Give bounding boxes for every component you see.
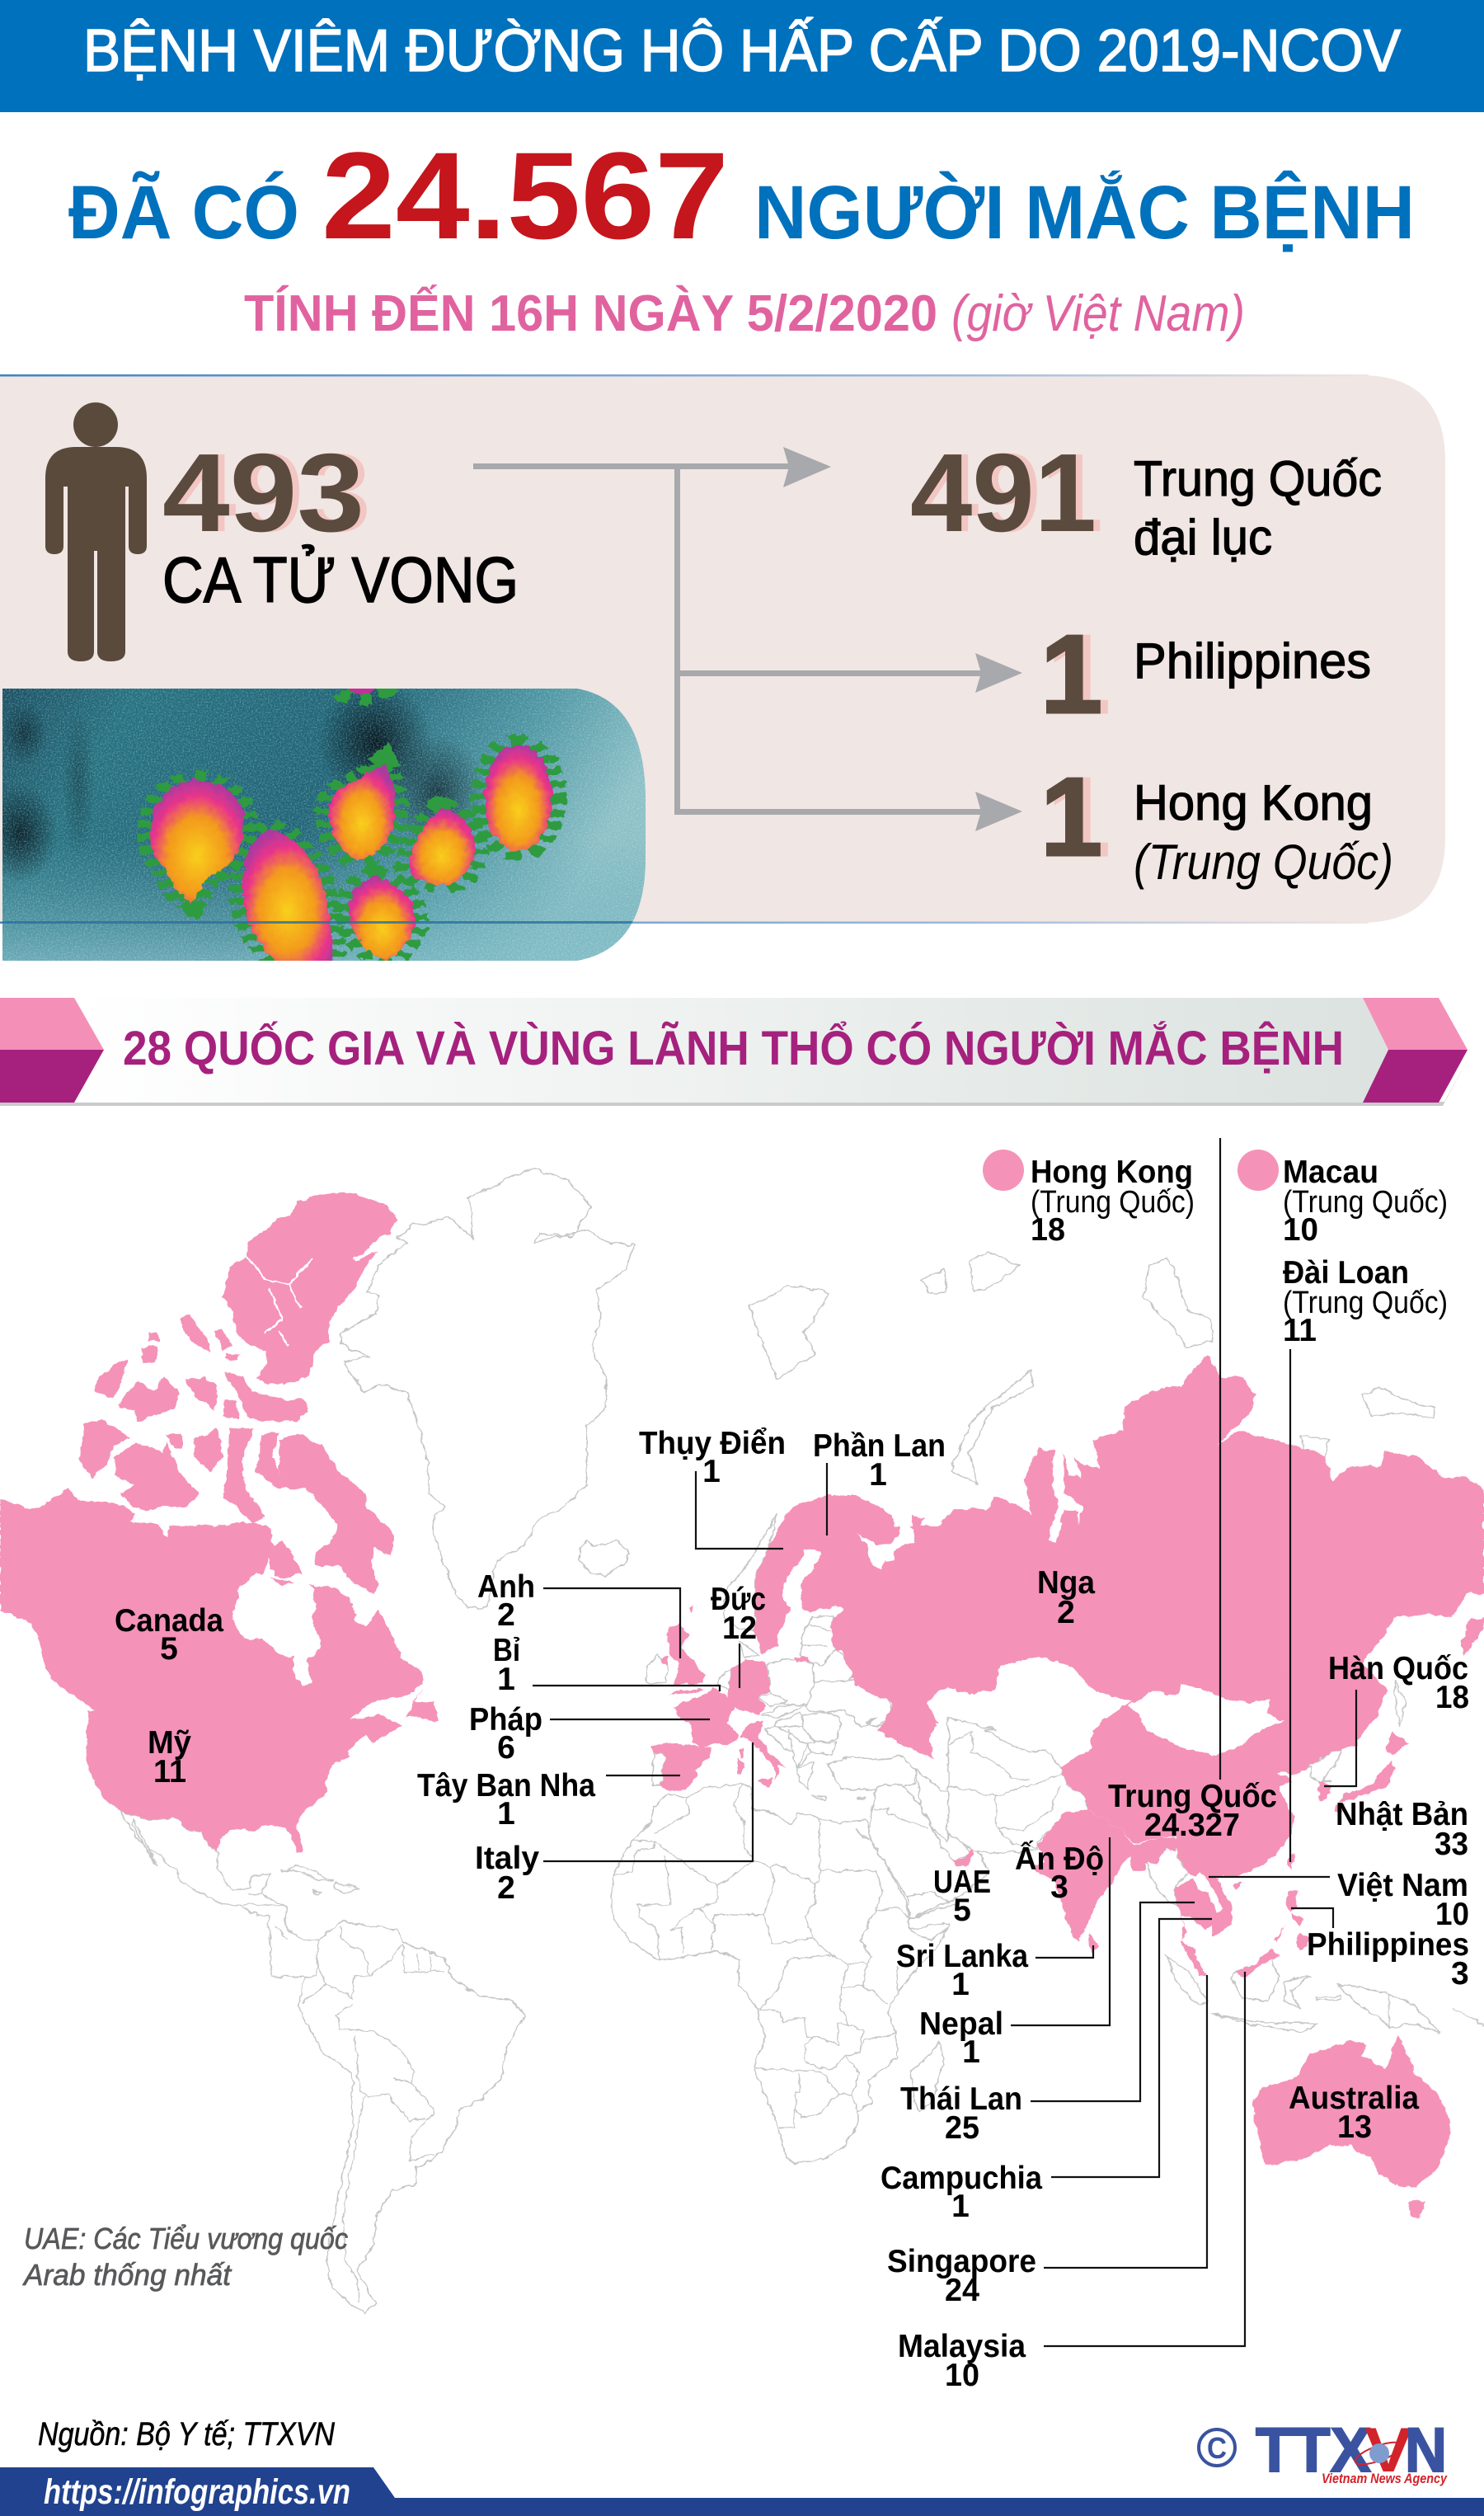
label: UAE: 5	[953, 1893, 971, 1928]
footer bar	[0, 2467, 1484, 2516]
label: Thái Lan	[900, 2081, 1022, 2146]
label: Thái Lan: Thái Lan	[900, 2081, 1022, 2117]
label: Phần Lan: Phần Lan	[813, 1428, 946, 1464]
label: Pháp	[469, 1702, 542, 1766]
label: Canada	[115, 1603, 223, 1667]
label: Malaysia: Malaysia	[898, 2329, 1026, 2364]
label: Ấn Độ: 3	[1050, 1869, 1068, 1905]
photo: coronavirus micrograph	[0, 679, 651, 965]
label: Trung Quốc đại lục	[1134, 451, 1382, 565]
label: Philippines: Philippines	[1134, 633, 1371, 689]
world map	[0, 1138, 1484, 2393]
label: Anh: 2	[497, 1597, 515, 1633]
label: Việt Nam: Việt Nam	[1337, 1868, 1468, 1903]
label: Hong Kong with marker: 18	[1031, 1212, 1065, 1248]
label: Italy	[475, 1841, 539, 1906]
number 491: 491	[917, 430, 1103, 555]
label: Thái Lan: 25	[945, 2110, 979, 2146]
logo: TTXVN: TTX	[1256, 2415, 1371, 2485]
label: Sri Lanka: 1	[951, 1967, 970, 2002]
label: Macau with marker	[1237, 1150, 1448, 1248]
label: UAE	[933, 1865, 991, 1928]
label: Thụy Điển: Thụy Điển	[639, 1426, 786, 1461]
label: UAE: UAE	[933, 1865, 991, 1900]
label: Bỉ: Bỉ	[493, 1633, 520, 1668]
label: Macau with marker: (Trung Quốc)	[1283, 1185, 1448, 1220]
country labels	[115, 1150, 1469, 2393]
arrows	[473, 447, 1022, 831]
label: Trung Quốc: Trung Quốc	[1108, 1779, 1277, 1814]
label: Thụy Điển: 1	[702, 1454, 721, 1489]
label: Pháp: Pháp	[469, 1702, 542, 1738]
label: Hàn Quốc: Hàn Quốc	[1328, 1651, 1468, 1686]
number 491: 491	[910, 430, 1097, 555]
label: Việt Nam: 10	[1435, 1897, 1469, 1932]
note: UAE: Arab thống nhất	[22, 2258, 232, 2292]
label: Campuchia	[881, 2161, 1042, 2224]
label: Australia: 13	[1337, 2109, 1372, 2145]
label: Nepal	[919, 2006, 1003, 2070]
label: Đức: Đức	[711, 1582, 766, 1617]
label: Nhật Bản: Nhật Bản	[1336, 1797, 1468, 1832]
source: Nguồn: Bộ Y tế; TTXVN	[38, 2416, 335, 2453]
label: Hàn Quốc: 18	[1435, 1680, 1469, 1715]
label: Mỹ	[148, 1725, 191, 1789]
label: Tây Ban Nha	[417, 1768, 595, 1832]
label: Thụy Điển	[639, 1426, 786, 1489]
label: Italy: 2	[497, 1870, 515, 1906]
label: Macau with marker: 10	[1283, 1212, 1318, 1248]
label: Mỹ: 11	[153, 1754, 186, 1789]
label: Bỉ: 1	[497, 1662, 515, 1697]
label: Trung Quốc	[1108, 1779, 1277, 1843]
label: Australia: Australia	[1289, 2081, 1419, 2116]
label: Hong Kong with marker: Hong Kong	[1031, 1155, 1193, 1190]
label: Nhật Bản	[1336, 1797, 1468, 1862]
label: Nepal: 1	[962, 2034, 980, 2070]
label: Hong Kong (Trung Quốc)	[1134, 775, 1393, 890]
label: Hong Kong with marker	[983, 1150, 1195, 1248]
subheading: date: (giờ Việt Nam)	[951, 285, 1245, 342]
number 1 Hong Kong: 1	[1040, 755, 1102, 879]
note: UAE: UAE: Các Tiểu vương quốc	[24, 2222, 348, 2255]
note: UAE	[22, 2222, 348, 2292]
label: Phần Lan: 1	[869, 1457, 887, 1493]
label: Trung Quốc đại lục: Trung Quốc	[1134, 451, 1382, 506]
label: Hong Kong (Trung Quốc): Hong Kong	[1134, 775, 1373, 830]
label: Tây Ban Nha: 1	[497, 1796, 515, 1832]
icon: person	[45, 402, 147, 661]
label: Australia	[1289, 2081, 1419, 2145]
label: Philippines	[1307, 1927, 1469, 1992]
label: Phần Lan	[813, 1428, 946, 1493]
number 1 Philippines: 1	[1048, 612, 1110, 736]
label: Nga: Nga	[1037, 1565, 1095, 1601]
death count 493: 493	[162, 430, 364, 555]
headline: total cases: ĐÃ CÓ	[68, 170, 299, 255]
label: Hong Kong (Trung Quốc): (Trung Quốc)	[1134, 835, 1393, 890]
logo: TTXVN	[1199, 2415, 1448, 2486]
logo: TTXVN: Vietnam News Agency	[1322, 2471, 1448, 2486]
label: Campuchia: Campuchia	[881, 2161, 1042, 2196]
label: Philippines: Philippines	[1307, 1927, 1469, 1963]
label: deaths: CA TỬ VONG	[162, 543, 519, 616]
label: Philippines: 3	[1451, 1956, 1469, 1992]
label: Canada: Canada	[115, 1603, 223, 1639]
label: Canada: 5	[160, 1631, 178, 1667]
affected countries (pink)	[0, 1192, 1484, 2219]
label: Bỉ	[493, 1633, 520, 1697]
label: Mỹ: Mỹ	[148, 1725, 191, 1761]
label: Đài Loan: Đài Loan	[1283, 1255, 1409, 1291]
label: Ấn Độ: Ấn Độ	[1015, 1841, 1104, 1877]
header title: BỆNH VIÊM ĐƯỜNG HÔ HẤP CẤP DO 2019-NCOV	[83, 17, 1401, 84]
label: Trung Quốc đại lục: đại lục	[1134, 510, 1272, 565]
label: Nga	[1037, 1565, 1095, 1630]
label: Việt Nam	[1337, 1868, 1469, 1932]
ribbon text: 28 QUỐC GIA VÀ VÙNG LÃNH THỔ CÓ NGƯỜI MẮC BỆNH	[123, 1022, 1344, 1075]
unaffected land outlines	[121, 1169, 1484, 2313]
label: Singapore	[887, 2244, 1036, 2308]
label: Trung Quốc: 24.327	[1144, 1808, 1240, 1843]
label: Nepal: Nepal	[919, 2006, 1003, 2042]
label: Hàn Quốc	[1328, 1651, 1469, 1715]
headline: total cases: 24.567	[322, 126, 729, 265]
label: Tây Ban Nha: Tây Ban Nha	[417, 1768, 595, 1804]
leader lines	[533, 1138, 1356, 2346]
panel: deaths	[0, 374, 1445, 924]
number 1 Hong Kong: 1	[1048, 755, 1110, 879]
headline: total cases	[68, 126, 1415, 265]
subheading: date: TÍNH ĐẾN 16H NGÀY 5/2/2020	[244, 285, 937, 342]
label: Anh: Anh	[477, 1569, 535, 1605]
logo: TTXVN: N	[1405, 2415, 1447, 2485]
label: Ấn Độ	[1015, 1841, 1104, 1905]
logo: TTXVN: V	[1364, 2415, 1412, 2485]
label: Sri Lanka	[896, 1939, 1028, 2002]
label: Anh	[477, 1569, 535, 1633]
label: Malaysia: 10	[945, 2358, 979, 2393]
label: Đài Loan: 11	[1283, 1313, 1317, 1348]
label: Macau with marker: Macau	[1283, 1155, 1378, 1190]
death count 493: 493	[169, 430, 371, 555]
footer url: https://infographics.vn	[44, 2472, 350, 2512]
label: Pháp: 6	[497, 1730, 515, 1766]
ribbon heading	[0, 998, 1471, 1106]
label: Đài Loan	[1283, 1255, 1448, 1348]
label: Đức	[711, 1582, 766, 1646]
number 1 Philippines: 1	[1040, 612, 1102, 736]
label: Hong Kong with marker: (Trung Quốc)	[1031, 1185, 1195, 1220]
header band	[0, 0, 1484, 112]
label: Sri Lanka: Sri Lanka	[896, 1939, 1028, 1974]
label: Nga: 2	[1057, 1595, 1075, 1630]
label: Đức: 12	[722, 1611, 757, 1646]
label: Singapore: 24	[945, 2273, 979, 2308]
label: Đài Loan: (Trung Quốc)	[1283, 1286, 1448, 1320]
logo: TTXVN: C	[1207, 2431, 1227, 2465]
label: Campuchia: 1	[951, 2189, 970, 2224]
label: Singapore: Singapore	[887, 2244, 1036, 2279]
headline: total cases: NGƯỜI MẮC BỆNH	[754, 170, 1415, 255]
label: Nhật Bản: 33	[1435, 1827, 1468, 1862]
label: Italy: Italy	[475, 1841, 539, 1876]
label: Malaysia	[898, 2329, 1026, 2393]
